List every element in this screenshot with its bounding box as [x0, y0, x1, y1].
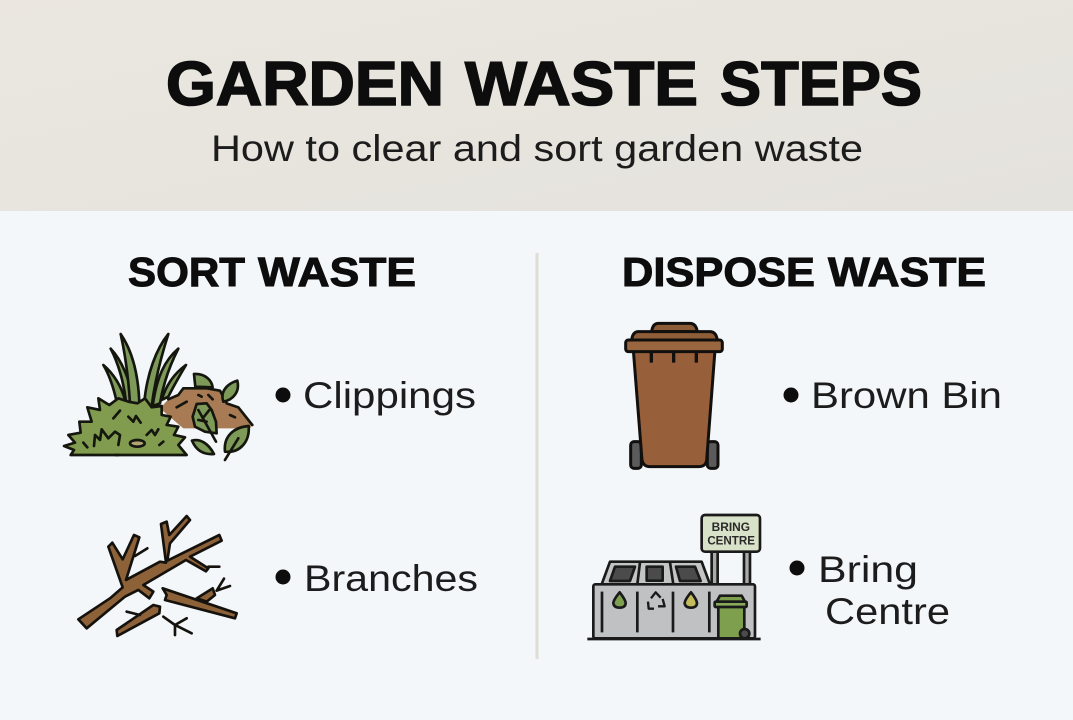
heading: dispose waste: WASTE: [828, 249, 986, 295]
heading: sort waste: WASTE: [258, 249, 416, 295]
panel: dispose waste: [587, 249, 1002, 639]
title: [166, 50, 922, 119]
icon: bring centre: BRING: [712, 521, 750, 534]
bullet and label: bring centre: Bring: [818, 549, 918, 590]
header band: [0, 0, 1073, 211]
heading: sort waste: [128, 249, 416, 295]
bullet and label: branches: Branches: [304, 558, 478, 599]
heading: dispose waste: [622, 249, 986, 295]
title: STEPS: [720, 50, 922, 119]
icon: bring centre: CENTRE: [707, 534, 755, 547]
heading: dispose waste: DISPOSE: [622, 249, 815, 295]
title: GARDEN: [166, 50, 444, 119]
heading: sort waste: SORT: [128, 249, 245, 295]
icon: bring centre: [587, 515, 761, 639]
bullet and label: bring centre: Centre: [825, 591, 950, 632]
bullet and label: brown bin: Brown Bin: [811, 375, 1002, 416]
icon: brown bin: [626, 323, 722, 468]
title: WASTE: [465, 50, 698, 119]
icon: clippings: [64, 334, 252, 460]
bullet and label: bring centre: [790, 549, 950, 632]
icon: branches: [78, 516, 237, 636]
bullet and label: clippings: Clippings: [303, 375, 476, 416]
panel: sort waste: [64, 249, 478, 636]
subtitle: How to clear and sort garden waste: [211, 128, 863, 169]
